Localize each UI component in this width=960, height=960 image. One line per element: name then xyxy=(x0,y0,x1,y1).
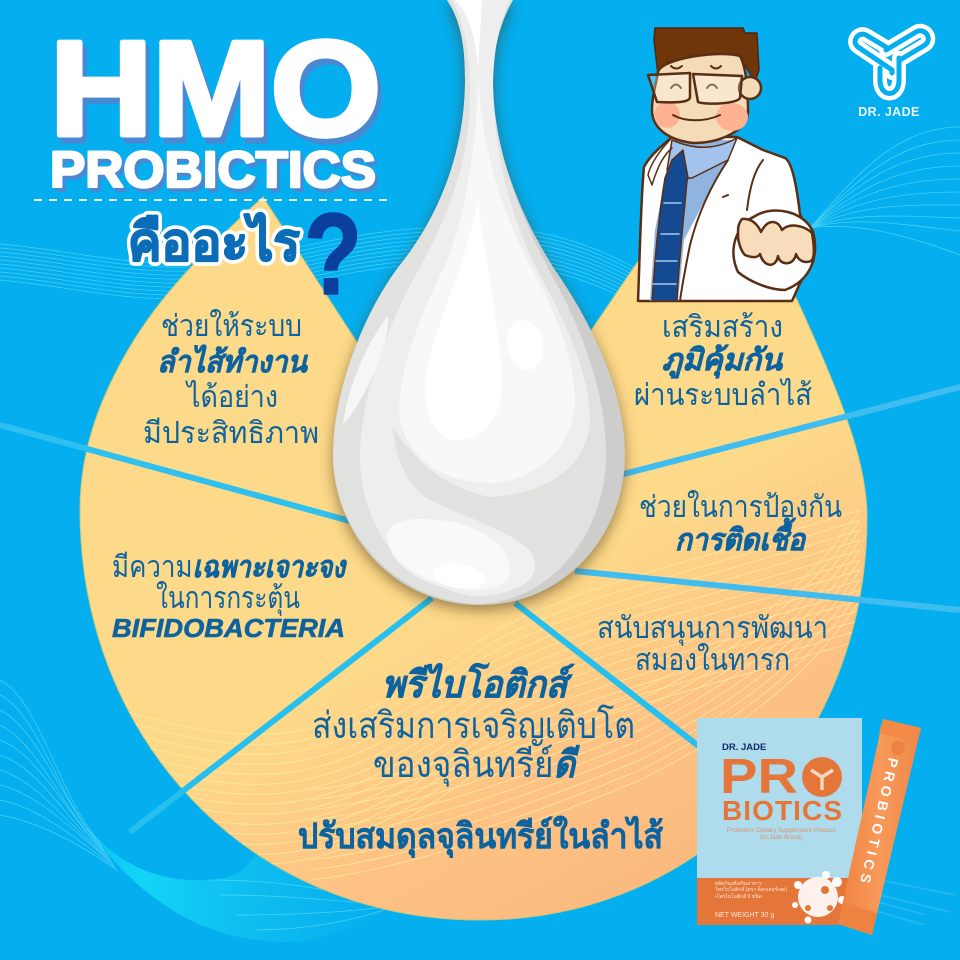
text block: balance: ปรับสมดุลจุลินทรีย์ในลำไส้ xyxy=(298,815,664,858)
emphasis: intestines work: ลำไส้ทำงาน xyxy=(157,344,308,379)
text block: prebiotics xyxy=(312,662,635,787)
milk drop xyxy=(333,0,625,610)
doctor fist xyxy=(733,210,815,290)
text block: immunity xyxy=(634,311,812,412)
title: HMO: HMO xyxy=(54,19,385,170)
text block: prebiotics: ส่งเสริมการเจริญเติบโต xyxy=(312,704,635,747)
text block: brain development xyxy=(597,612,828,677)
product: box: Probiotics Dietary Supplement Product xyxy=(727,827,835,834)
product: box: •โพรไบโอติกส์ 9 ชนิด xyxy=(715,893,762,900)
text: คืออะไร xyxy=(128,212,300,272)
title: PROBICTICS: PROBICTICS xyxy=(50,141,376,198)
logo wordmark: DR. JADE xyxy=(858,105,920,119)
divider spokes xyxy=(0,387,960,832)
product: box: BIOTICS xyxy=(722,795,842,826)
text block: bifidobacteria: BIFIDOBACTERIA xyxy=(112,613,345,643)
logo: Dr. Jade xyxy=(855,31,928,119)
doctor illustration xyxy=(638,28,815,301)
text block: bifidobacteria: ในการกระตุ้น xyxy=(156,581,300,617)
text block: brain development: สนับสนุนการพัฒนา xyxy=(597,612,828,647)
text block: digestive system xyxy=(143,309,319,450)
product: box: PR xyxy=(720,750,798,804)
text block: infection: ช่วยในการป้องกัน xyxy=(639,490,842,524)
text block: digestive system: ช่วยให้ระบบ xyxy=(161,309,302,343)
text block: bifidobacteria: มีความเฉพาะเจาะจง xyxy=(112,551,347,584)
text block: bifidobacteria xyxy=(112,551,347,643)
text block: immunity: ผ่านระบบลำไส้ xyxy=(634,377,812,412)
doctor head xyxy=(652,54,748,143)
product: sachet: PROBIOTICS xyxy=(857,756,902,885)
title: what is it: คืออะไร xyxy=(128,212,300,272)
text block: digestive system: ได้อย่าง xyxy=(185,379,278,414)
text block: infection: การติดเชื้อ xyxy=(675,517,807,557)
product: sachet xyxy=(838,719,921,935)
product: box: ผลิตภัณฑ์เสริมอาหาร xyxy=(715,880,762,887)
icon: question mark: ? xyxy=(304,189,362,319)
text block: immunity: เสริมสร้าง xyxy=(662,311,783,344)
text block: infection xyxy=(639,490,842,557)
title: HMO: HMO xyxy=(50,13,381,164)
text block: immunity: ภูมิคุ้มกัน xyxy=(662,344,784,379)
product: box: (Dr.Jade Brand) xyxy=(760,835,802,841)
text block: prebiotics: ของจุลินทรีย์ดี xyxy=(373,744,580,787)
doctor glasses xyxy=(648,73,742,104)
product: box: โพรไบโอติกส์ (ตรา ด็อกเตอร์เจด) xyxy=(715,885,787,893)
title: PROBICTICS: PROBICTICS xyxy=(53,145,379,202)
product: box: DR. JADE xyxy=(722,742,766,753)
text block: brain development: สมองในทารก xyxy=(635,643,790,677)
panel: yellow drop-shaped backdrop xyxy=(80,170,867,920)
text block: digestive system: มีประสิทธิภาพ xyxy=(143,417,319,450)
product: box: NET WEIGHT 30 g xyxy=(715,912,774,919)
product: box xyxy=(697,718,862,925)
text block: prebiotics: พรีไบโอติกส์ xyxy=(382,662,574,705)
doctor hair xyxy=(654,28,759,82)
